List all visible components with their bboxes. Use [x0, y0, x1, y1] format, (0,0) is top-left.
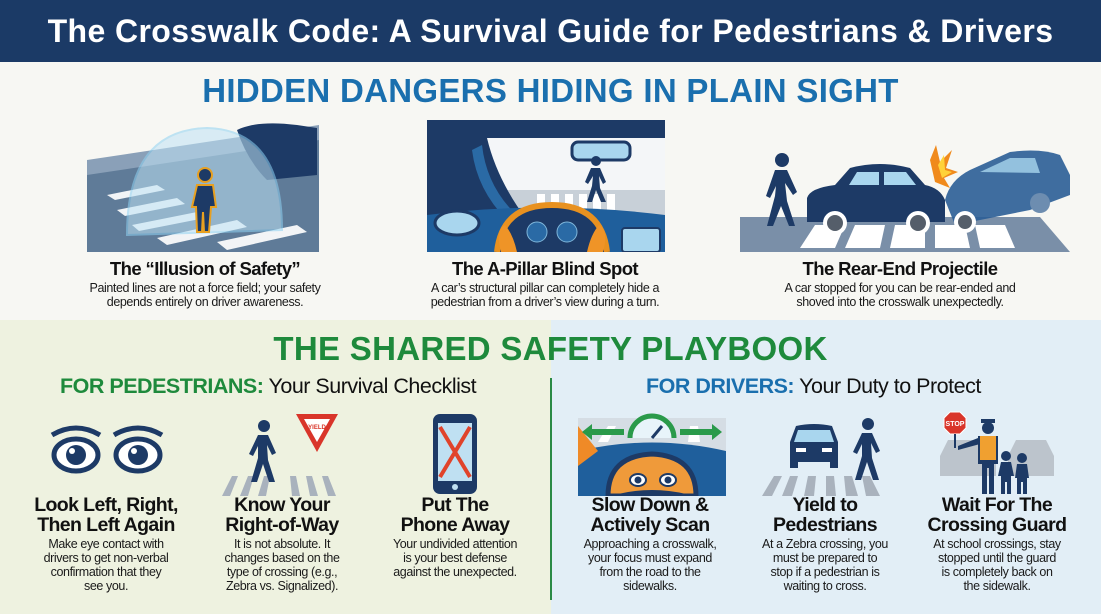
- item: crossing guard: [928, 494, 1066, 593]
- illustration: A-pillar blind spot: [427, 120, 665, 252]
- item: phone away: Put The: [421, 494, 489, 516]
- item: phone away: Your undivided attention: [393, 537, 517, 551]
- text: rear-end: [784, 281, 1015, 309]
- text: pillar: [431, 281, 660, 309]
- item: crossing guard: is completely back on: [941, 565, 1053, 579]
- panel: pedestrians background: [0, 320, 551, 614]
- text: illusion: Painted lines are not a force field; your safety: [90, 281, 320, 295]
- title bar: [0, 0, 1101, 62]
- item: right-of-way: changes based on the: [224, 551, 340, 565]
- text: illusion: [90, 281, 321, 309]
- title bar: The Crosswalk Code: A Survival Guide for Pedestrians & Drivers: [48, 13, 1053, 49]
- item: look left: drivers to get non-verbal: [44, 551, 168, 565]
- item: right-of-way: [224, 494, 340, 593]
- panel title: pillar: The A-Pillar Blind Spot: [452, 258, 638, 279]
- item: look left: Then Left Again: [37, 514, 175, 536]
- icon: pedestrian with yield: [222, 414, 338, 496]
- icon: phone: [433, 414, 477, 494]
- item: phone away: Phone Away: [401, 514, 509, 536]
- item: yield: Pedestrians: [773, 514, 877, 536]
- item: yield: stop if a pedestrian is: [771, 565, 879, 579]
- panel title: rear-end: The Rear-End Projectile: [803, 258, 997, 279]
- panel: drivers background: [551, 320, 1101, 614]
- item: look left: see you.: [84, 579, 128, 593]
- item: right-of-way: It is not absolute. It: [234, 537, 330, 551]
- item: look left: [34, 494, 178, 593]
- item: slow down: your focus must expand: [588, 551, 712, 565]
- item: slow down: Approaching a crosswalk,: [584, 537, 716, 551]
- subheading pedestrians: FOR PEDESTRIANS: Your Survival Checklist: [60, 374, 476, 398]
- item: yield: waiting to cross.: [784, 579, 866, 593]
- item: slow down: sidewalks.: [623, 579, 677, 593]
- item: crossing guard: Wait For The: [942, 494, 1052, 516]
- item: yield: [762, 494, 888, 593]
- text: pillar: A car’s structural pillar can completely hide a: [431, 281, 659, 295]
- item: yield: Yield to: [793, 494, 857, 516]
- icon: pedestrian with yield: YIELD: [308, 425, 326, 431]
- item: phone away: against the unexpected.: [393, 565, 517, 579]
- text: rear-end: shoved into the crosswalk unexpectedly.: [796, 295, 1004, 309]
- heading: hidden dangers: HIDDEN DANGERS HIDING IN PLAIN SIGHT: [202, 72, 899, 109]
- heading: shared playbook: THE SHARED SAFETY PLAYBOOK: [273, 330, 828, 367]
- item: crossing guard: stopped until the guard: [938, 551, 1056, 565]
- item: right-of-way: type of crossing (e.g.,: [227, 565, 337, 579]
- item: phone away: is your best defense: [403, 551, 507, 565]
- item: slow down: Actively Scan: [590, 514, 710, 536]
- item: right-of-way: Know Your: [234, 494, 330, 516]
- item: slow down: [584, 494, 716, 593]
- icon: crossing guard: [940, 412, 1054, 494]
- item: look left: confirmation that they: [51, 565, 161, 579]
- illustration: illusion of safety: [87, 123, 319, 252]
- subheading drivers: FOR DRIVERS: Your Duty to Protect: [646, 374, 981, 398]
- panel title: illusion: The “Illusion of Safety”: [110, 258, 300, 279]
- item: yield: must be prepared to: [773, 551, 877, 565]
- item: right-of-way: Right-of-Way: [225, 514, 339, 536]
- item: look left: Make eye contact with: [48, 537, 164, 551]
- illustration: rear-end projectile: [740, 145, 1070, 252]
- item: phone away: [393, 494, 517, 579]
- item: slow down: from the road to the: [599, 565, 701, 579]
- item: look left: Look Left, Right,: [34, 494, 178, 516]
- icon: crossing guard: STOP: [946, 421, 965, 428]
- item: crossing guard: Crossing Guard: [928, 514, 1066, 536]
- text: illusion: depends entirely on driver awareness.: [107, 295, 303, 309]
- item: yield: At a Zebra crossing, you: [762, 537, 888, 551]
- item: crossing guard: the sidewalk.: [963, 579, 1031, 593]
- text: pillar: pedestrian from a driver’s view during a turn.: [431, 295, 659, 309]
- icon: driver scanning: [578, 414, 726, 496]
- item: slow down: Slow Down &: [592, 494, 708, 516]
- item: right-of-way: Zebra vs. Signalized).: [226, 579, 338, 593]
- icon: car and pedestrian: [762, 418, 880, 496]
- icon: eyes: [50, 426, 164, 474]
- text: rear-end: A car stopped for you can be rear-ended and: [785, 281, 1015, 295]
- item: crossing guard: At school crossings, stay: [933, 537, 1061, 551]
